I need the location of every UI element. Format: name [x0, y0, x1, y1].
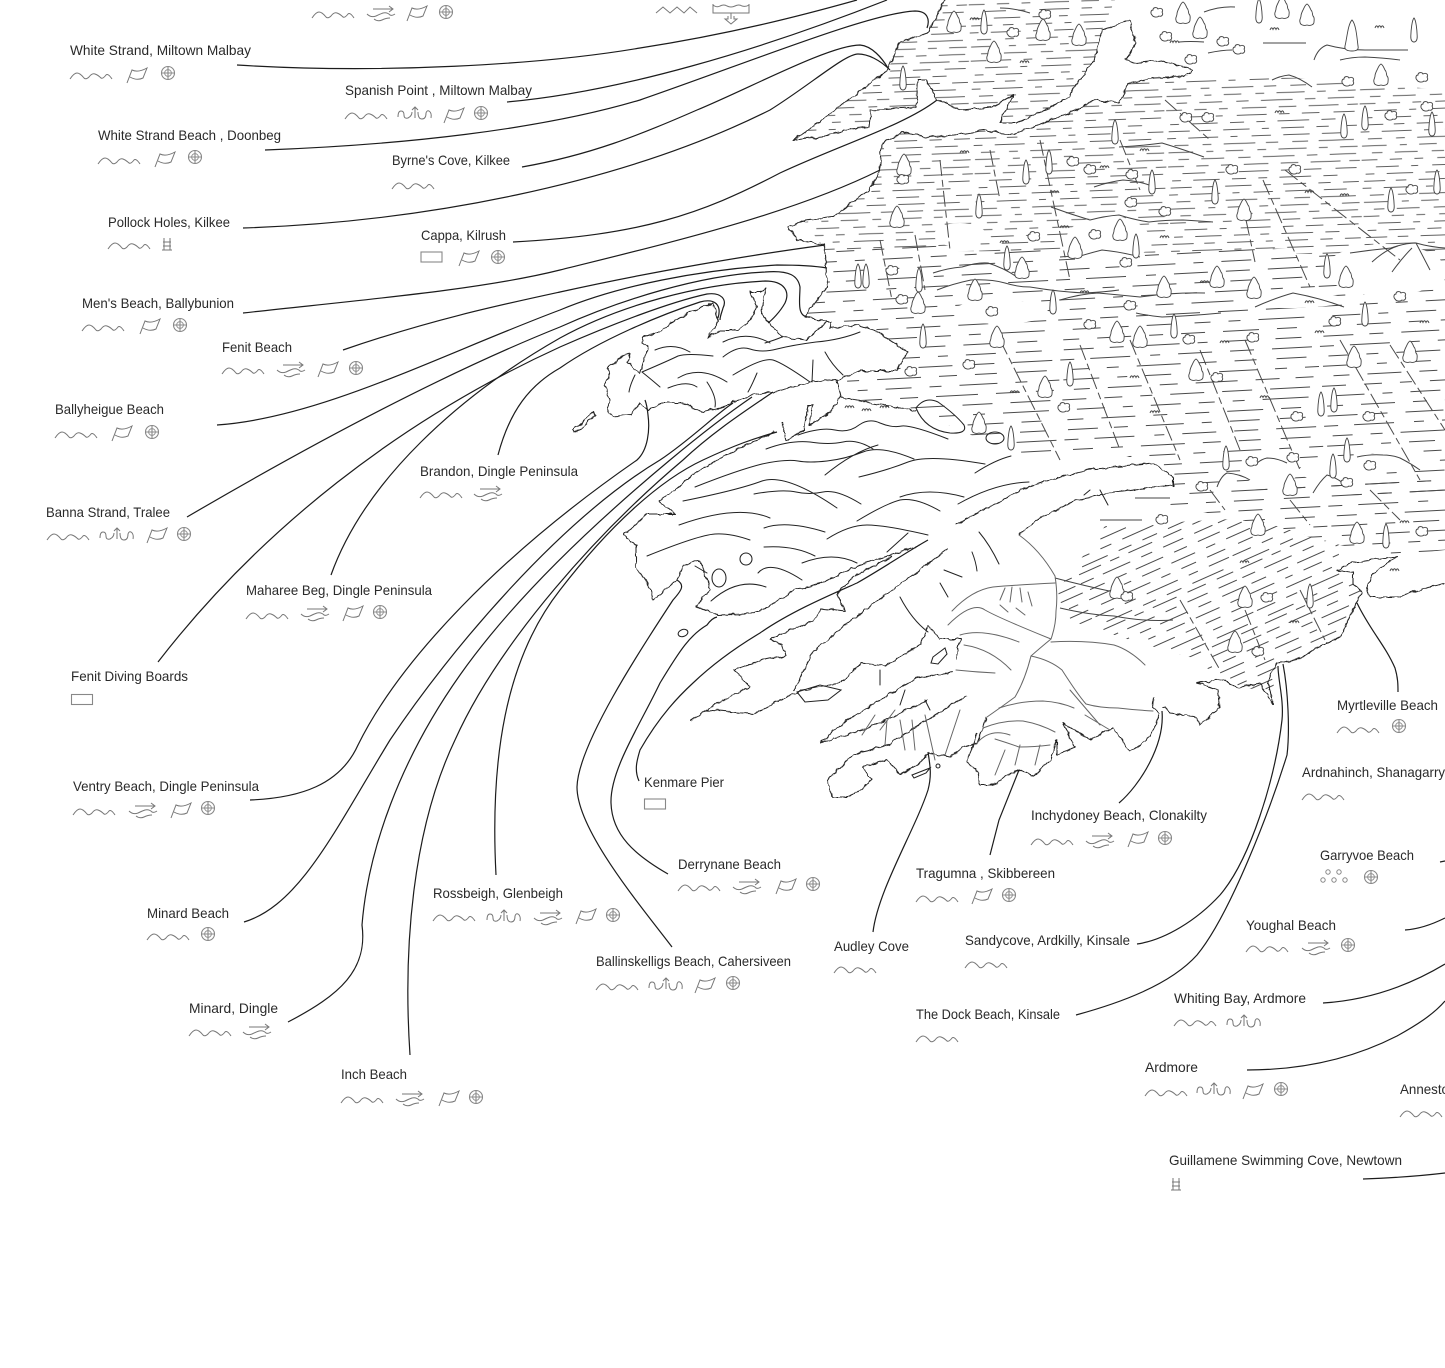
- label: Ballinskelligs Beach, Cahersiveen: [596, 953, 791, 993]
- label: Rossbeigh, Glenbeigh: [433, 885, 620, 925]
- label: Myrtleville Beach: Myrtleville Beach: [1337, 697, 1438, 713]
- label: Derrynane Beach: [678, 856, 820, 894]
- label: Audley Cove: [834, 938, 909, 973]
- field gaps around hills: [934, 216, 1445, 597]
- leader lines: [158, 0, 1445, 1179]
- label: Derrynane Beach: Derrynane Beach: [678, 856, 781, 872]
- label: Ballyheigue Beach: [55, 401, 164, 441]
- label: Audley Cove: Audley Cove: [834, 938, 909, 954]
- label: Garryvoe Beach: Garryvoe Beach: [1320, 847, 1414, 863]
- label: Youghal Beach: [1246, 917, 1354, 955]
- label: Tragumna, Skibbereen: [916, 865, 1055, 904]
- label: White Strand Beach, Doonbeg: [98, 127, 281, 167]
- label: Sandycove, Ardkilly, Kinsale: Sandycove, Ardkilly, Kinsale: [965, 932, 1130, 948]
- partial top row icons: pier with ladder: [656, 4, 749, 24]
- label: Spanish Point, Miltown Malbay: Spanish Point , Miltown Malbay: [345, 82, 532, 98]
- label: Kenmare Pier: [644, 774, 724, 809]
- inland contours of Cork: [862, 535, 1153, 775]
- label: Tragumna, Skibbereen: Tragumna , Skibbereen: [916, 865, 1055, 881]
- label: Fenit Diving Boards: [71, 668, 188, 704]
- label: Fenit Diving Boards: Fenit Diving Boards: [71, 668, 188, 684]
- label: Pollock Holes, Kilkee: [108, 214, 230, 250]
- label: Garryvoe Beach: [1320, 847, 1414, 884]
- map: south-west coast of Ireland: [573, 0, 1445, 797]
- hill contours: [933, 7, 1445, 621]
- label: White Strand, Miltown Malbay: [70, 42, 251, 83]
- label: Cappa, Kilrush: Cappa, Kilrush: [421, 227, 506, 243]
- field texture: land parcels: [793, 0, 1445, 690]
- label: Byrne's Cove, Kilkee: [392, 152, 510, 189]
- label: The Dock Beach, Kinsale: [916, 1006, 1060, 1042]
- label: White Strand, Miltown Malbay: White Strand, Miltown Malbay: [70, 42, 251, 58]
- label: Men's Beach, Ballybunion: [82, 295, 234, 334]
- label: Pollock Holes, Kilkee: Pollock Holes, Kilkee: [108, 214, 230, 230]
- mountain ridges: [629, 332, 1108, 710]
- label: Inchydoney Beach, Clonakilty: Inchydoney Beach, Clonakilty: [1031, 807, 1207, 823]
- label: Inch Beach: Inch Beach: [341, 1066, 407, 1082]
- label: Ballyheigue Beach: Ballyheigue Beach: [55, 401, 164, 417]
- label: Myrtleville Beach: [1337, 697, 1438, 733]
- label: Annestown: [1400, 1081, 1445, 1117]
- label: The Dock Beach, Kinsale: The Dock Beach, Kinsale: [916, 1006, 1060, 1022]
- large cypress on the northern hill: [1345, 20, 1358, 51]
- label: Banna Strand, Tralee: [46, 504, 190, 543]
- label: Ardmore: [1145, 1059, 1288, 1099]
- label: Rossbeigh, Glenbeigh: Rossbeigh, Glenbeigh: [433, 885, 563, 901]
- label: Ardnahinch, Shanagarry: [1302, 764, 1445, 800]
- label: Brandon, Dingle Peninsula: [420, 463, 578, 501]
- label: Inchydoney Beach, Clonakilty: [1031, 807, 1207, 848]
- label: Ardmore: Ardmore: [1145, 1059, 1198, 1075]
- label: Minard, Dingle: [189, 1000, 278, 1039]
- label: Ventry Beach, Dingle Peninsula: Ventry Beach, Dingle Peninsula: [73, 778, 259, 794]
- label: Guillamene Swimming Cove, Newtown: Guillamene Swimming Cove, Newtown: [1169, 1152, 1402, 1168]
- label: Brandon, Dingle Peninsula: Brandon, Dingle Peninsula: [420, 463, 578, 479]
- field boundary lines: [880, 100, 1445, 670]
- label: Sandycove, Ardkilly, Kinsale: [965, 932, 1130, 968]
- label: Maharee Beg, Dingle Peninsula: [246, 582, 432, 621]
- label: Guillamene Swimming Cove, Newtown: [1169, 1152, 1402, 1190]
- label: Youghal Beach: Youghal Beach: [1246, 917, 1336, 933]
- label: Maharee Beg, Dingle Peninsula: Maharee Beg, Dingle Peninsula: [246, 582, 432, 598]
- label: Ventry Beach, Dingle Peninsula: [73, 778, 259, 818]
- label: Byrne's Cove, Kilkee: Byrne's Cove, Kilkee: [392, 152, 510, 168]
- label: Inch Beach: [341, 1066, 482, 1106]
- lakes and islands: [677, 400, 1004, 778]
- label: Whiting Bay, Ardmore: [1174, 990, 1306, 1027]
- trees: [845, 0, 1440, 656]
- partial top row icons: [312, 6, 452, 21]
- label: Whiting Bay, Ardmore: Whiting Bay, Ardmore: [1174, 990, 1306, 1006]
- label: White Strand Beach, Doonbeg: White Strand Beach , Doonbeg: [98, 127, 281, 143]
- label: Fenit Beach: [222, 339, 362, 377]
- label: Cappa, Kilrush: [421, 227, 506, 266]
- label: Fenit Beach: Fenit Beach: [222, 339, 292, 355]
- label: Spanish Point, Miltown Malbay: [345, 82, 532, 123]
- label: Banna Strand, Tralee: Banna Strand, Tralee: [46, 504, 170, 520]
- label: Kenmare Pier: Kenmare Pier: [644, 774, 724, 790]
- label: Minard Beach: Minard Beach: [147, 905, 229, 921]
- label: Minard, Dingle: Minard, Dingle: [189, 1000, 278, 1016]
- label: Minard Beach: [147, 905, 229, 940]
- label: Men's Beach, Ballybunion: Men's Beach, Ballybunion: [82, 295, 234, 311]
- label: Ballinskelligs Beach, Cahersiveen: Ballinskelligs Beach, Cahersiveen: [596, 953, 791, 969]
- coastline: [573, 0, 1445, 797]
